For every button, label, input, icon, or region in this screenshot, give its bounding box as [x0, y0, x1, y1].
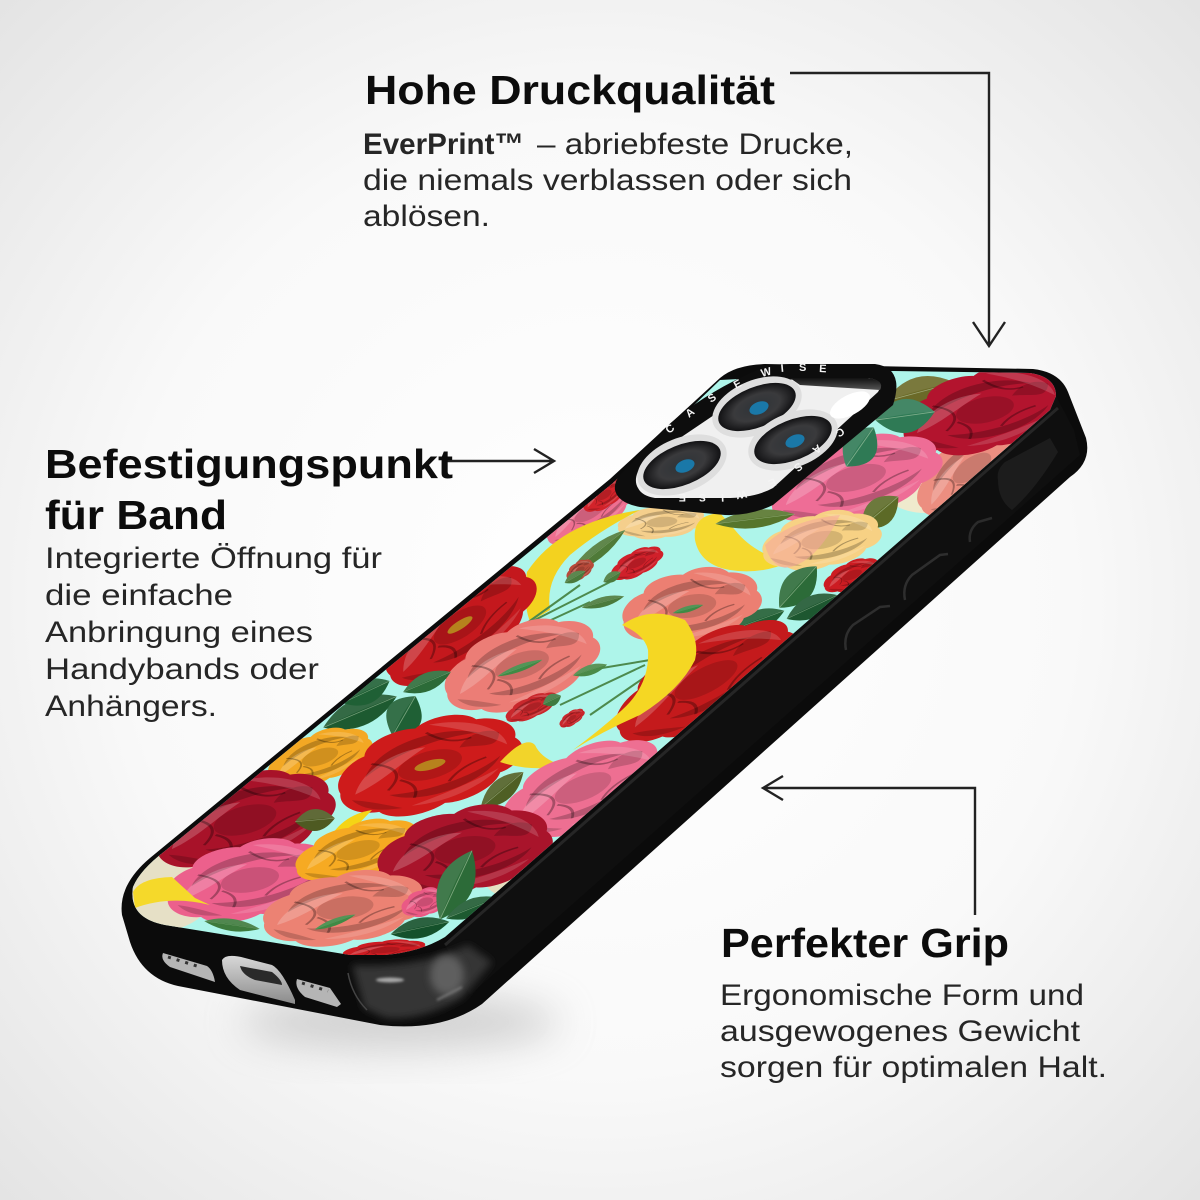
- body line 1: Integrierte Öffnung für: [45, 542, 382, 575]
- heading line 1: Befestigungspunkt: [45, 441, 453, 487]
- body line 4: Handybands oder: [45, 653, 319, 686]
- rose: red left middle: [386, 566, 537, 686]
- bud: red upper: [611, 546, 664, 580]
- side button: strap anchor: [998, 438, 1058, 510]
- lens: top: [703, 364, 811, 450]
- leaf: olive left of banana: [577, 530, 626, 564]
- bottom speaker right: [296, 979, 341, 1007]
- body line 2: die einfache: [45, 579, 233, 612]
- body line 1: EverPrint™: [363, 128, 524, 161]
- rose: red bottom edge: [342, 937, 428, 963]
- case body: [122, 364, 1087, 1026]
- text block: grip: [720, 920, 1107, 1084]
- leaf: olive: [473, 764, 531, 816]
- cream corner: lower left: [132, 841, 200, 928]
- rose: cream left of camera: [618, 508, 704, 540]
- rose: coral top right: [917, 432, 1024, 515]
- rose: red centre right: [616, 620, 794, 742]
- rose: red left of camera: [583, 478, 620, 512]
- lens: right: [739, 397, 847, 483]
- body line 1 continued: – abriebfeste Drucke,: [537, 128, 853, 161]
- bud: small upper: [566, 559, 594, 580]
- text block: strap attachment: [45, 441, 453, 723]
- cream centre: upper right: [898, 481, 968, 513]
- side button: volume down: [845, 606, 890, 650]
- phone case: [122, 364, 1087, 1026]
- rose: cream yellow: [762, 510, 882, 570]
- banana: far left: [133, 877, 210, 908]
- inner shadow bar: [790, 378, 881, 390]
- body line 1: Ergonomische Form und: [720, 979, 1084, 1012]
- heading: Perfekter Grip: [721, 920, 1009, 966]
- heading: Hohe Druckqualität: [365, 67, 775, 113]
- side button: action: [970, 518, 992, 542]
- body line 3: sorgen für optimalen Halt.: [720, 1051, 1107, 1084]
- stems: [528, 582, 648, 716]
- camera module: [615, 362, 896, 515]
- arrow: strap attachment: [445, 449, 554, 473]
- body line 5: Anhängers.: [45, 690, 217, 723]
- mint base: [132, 371, 1056, 955]
- body line 2: ausgewogenes Gewicht: [720, 1015, 1081, 1048]
- flash highlight: [826, 386, 874, 424]
- rose: pink right: [488, 720, 677, 856]
- leaf: green top: [875, 398, 935, 434]
- text block: print quality: [363, 67, 853, 233]
- rose: orange upper: [268, 728, 372, 782]
- camera glass: [636, 378, 880, 498]
- banana: small lower left: [326, 810, 372, 845]
- stem tuft: [498, 660, 542, 676]
- leaves: bottom dark green: [389, 843, 501, 944]
- leaf: top right olive: [894, 376, 950, 402]
- heading line 2: für Band: [45, 492, 227, 538]
- rose: big pink: [772, 434, 942, 520]
- corner gloss patch: [430, 955, 464, 995]
- flower: salmon centre: [444, 618, 600, 713]
- leaf: bottom small: [203, 915, 261, 935]
- rose: dark red top right: [904, 372, 1056, 456]
- leaf: olive lower left: [294, 807, 336, 833]
- flower: salmon bottom: [258, 862, 431, 955]
- rose rim pink: [765, 515, 840, 568]
- rose: pink lower left: [160, 828, 340, 933]
- side button: volume up: [904, 554, 948, 600]
- body line 3: Anbringung eines: [45, 616, 313, 649]
- usb port: [222, 956, 295, 1004]
- lens: left: [628, 422, 736, 508]
- rose: pink under leaf: [398, 883, 452, 921]
- corner gloss streak: [437, 987, 462, 1000]
- flower: salmon top middle: [622, 566, 762, 642]
- rose: pink left of camera: [546, 481, 628, 544]
- buds: small lower: [506, 664, 607, 728]
- banana: crescent lower: [573, 614, 696, 750]
- bud: calyx upper: [603, 571, 621, 583]
- corner gloss: [352, 945, 492, 1019]
- body line 3: ablösen.: [363, 200, 490, 233]
- floral print: [132, 371, 1056, 955]
- bud: calyx small: [564, 570, 586, 584]
- arrow: print quality: [790, 73, 1005, 346]
- corner chamfer line: [348, 973, 367, 1010]
- banana: stub: [500, 742, 565, 768]
- cream lower right: [487, 864, 529, 894]
- leaf: olive near banana: [715, 509, 795, 529]
- stem tuft: [672, 604, 704, 614]
- banana: top: [694, 514, 778, 572]
- ring wordmark lower: CASEWISE: [679, 425, 846, 503]
- side wall sheen: [445, 396, 1080, 995]
- arrow: grip: [763, 776, 975, 915]
- leaves: dark green right cluster: [739, 566, 838, 626]
- rose: orange lower: [289, 808, 427, 893]
- camera ring: [615, 364, 896, 515]
- body line 2: die niemals verblassen oder sich: [363, 164, 852, 197]
- ring wordmark upper: CASEWISE: [663, 362, 827, 436]
- leaf: small green by camera: [842, 427, 878, 467]
- banana: crescent upper: [525, 510, 640, 622]
- bud: green upper: [582, 596, 624, 608]
- bud: red right: [824, 558, 878, 592]
- bezel highlight: [445, 408, 1058, 945]
- bottom speaker left: [162, 953, 215, 982]
- leaves: dark green left cluster: [323, 670, 451, 734]
- stem tuft: [313, 911, 357, 933]
- phone drop shadow: [240, 994, 560, 1050]
- rose: dark red lower left: [144, 754, 345, 887]
- stem: olive: [863, 496, 898, 528]
- rose: dark red lower: [370, 793, 559, 907]
- rose: large red: [338, 714, 522, 816]
- corner gloss highlight: [376, 978, 404, 982]
